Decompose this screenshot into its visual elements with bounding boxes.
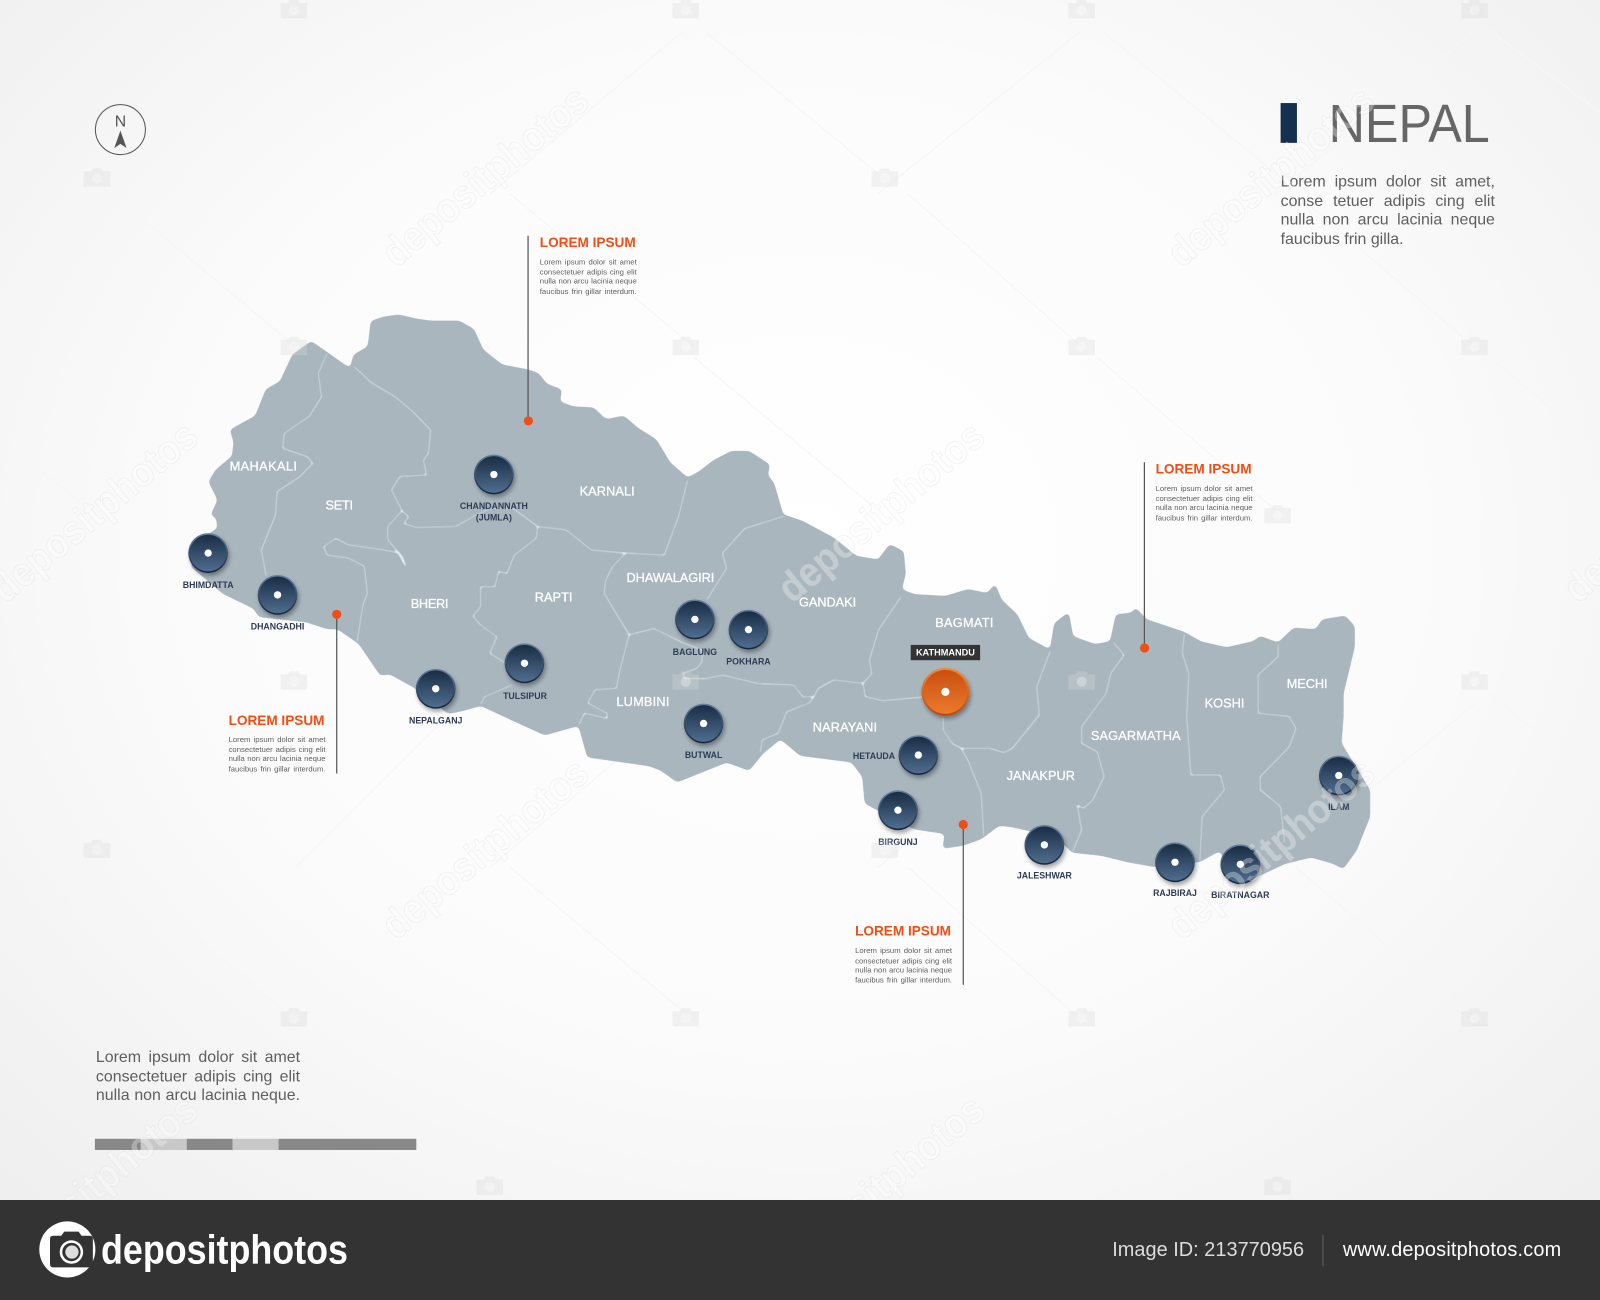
text block: bottom left [96,1049,300,1110]
pin: Biratnagar: BIRATNAGAR [1211,890,1270,900]
icon: compass: N [115,114,126,131]
intro text: faucibus frin gilla. [1281,231,1404,248]
callout: north: Lorem ipsum dolor sit amet [540,257,637,266]
title block [1281,95,1495,251]
pin: Birgunj: BIRGUNJ [878,837,918,847]
region names: SAGARMATHA [1091,728,1181,743]
region names: SETI [326,498,353,513]
capital: Kathmandu [911,645,980,716]
callout: east: Lorem ipsum dolor sit amet [1156,484,1253,493]
callout: east: consectetuer adipis cing elit [1156,493,1253,503]
pin: Tulsipur: TULSIPUR [503,691,548,701]
region names [230,458,1328,783]
text block: bottom left: Lorem ipsum dolor sit amet [96,1049,300,1066]
title: NEPAL [1329,95,1490,154]
callout: east: faucibus frin gillar interdum. [1156,513,1253,522]
region names: JANAKPUR [1007,768,1075,783]
pin: Jaleshwar: JALESHWAR [1017,871,1073,881]
pin: Rajbiraj [1153,842,1197,898]
pin: Butwal [684,704,723,760]
pin: Tulsipur [503,643,548,701]
region names: KOSHI [1205,696,1244,711]
pin: Ilam: ILAM [1328,802,1349,812]
pin: Rajbiraj: RAJBIRAJ [1153,888,1197,898]
intro text [1281,173,1495,251]
callout: south: faucibus frin gillar interdum. [855,975,952,984]
scale bar [95,1139,416,1150]
icon: compass [95,105,145,155]
callout: north: LOREM IPSUM [540,235,636,251]
stock watermarks: depositphotos [372,76,597,276]
pin: Nepalganj: NEPALGANJ [409,715,463,725]
region names: MECHI [1287,676,1328,691]
footer band [0,1200,1600,1300]
pin: Dhangadhi [251,575,304,632]
region names: BHERI [411,596,448,611]
pin: Bhimdatta [183,533,234,590]
callout: west: nulla non arcu lacinia neque [229,754,326,763]
callout: north: nulla non arcu lacinia neque [540,277,637,286]
region names: MAHAKALI [230,458,297,473]
stock watermarks: depositphotos [1158,749,1383,948]
stock watermarks: depositphotos [768,1086,993,1285]
region names: BAGMATI [935,615,993,630]
pin: Pokhara [726,610,771,666]
stock watermarks: depositphotos [768,412,993,611]
callout: west: faucibus frin gillar interdum. [229,764,326,773]
title accent bar [1281,103,1297,143]
pin: Baglung: BAGLUNG [673,647,717,657]
pin: Pokhara: POKHARA [726,656,771,666]
pin: Hetauda [853,735,938,775]
region names: NARAYANI [813,720,877,735]
callout: south: consectetuer adipis cing elit [855,956,952,965]
text block: bottom left: consectetuer adipis cing elit [96,1068,300,1085]
map of Nepal [191,315,1369,880]
capital: Kathmandu: KATHMANDU [916,648,975,658]
text block: bottom left: nulla non arcu lacinia neque. [96,1087,300,1104]
callout: north [524,235,637,426]
callout: east: LOREM IPSUM [1156,461,1252,477]
icon: camera logo [39,1221,95,1278]
stock watermarks: depositphotos [1158,76,1383,276]
callout: west: consectetuer adipis cing elit [229,744,326,754]
intro text: Lorem ipsum dolor sit amet, [1281,173,1495,191]
callout: north: faucibus frin gillar interdum. [540,286,637,296]
pin: Bhimdatta: BHIMDATTA [183,580,234,590]
intro text: conse tetuer adipis cing elit [1281,192,1495,210]
region names: KARNALI [580,483,635,498]
pin: Hetauda: HETAUDA [853,751,896,761]
callout: west [229,610,341,776]
logo wordmark: depositphotos [101,1226,348,1272]
callout: west: Lorem ipsum dolor sit amet [229,735,326,744]
stock watermarks: depositphotos [372,749,597,948]
pin: Chandannath: (JUMLA) [476,512,512,522]
pin: Ilam [1319,756,1359,812]
callout: west: LOREM IPSUM [229,713,324,729]
pin: Biratnagar [1211,844,1270,900]
pin: Jaleshwar [1017,825,1073,881]
intro text: nulla non arcu lacinia neque [1281,211,1495,229]
region names: LUMBINI [616,694,669,709]
pin: Chandannath: CHANDANNATH [460,501,528,511]
pin: Baglung [673,599,717,657]
callout: east: nulla non arcu lacinia neque [1156,503,1253,512]
callout: north: consectetuer adipis cing elit [540,267,637,276]
callout: south: LOREM IPSUM [855,924,951,940]
region borders [261,353,1296,861]
pin: Butwal: BUTWAL [685,750,723,760]
pin: Birgunj [878,790,918,847]
pin: Chandannath [460,455,528,522]
pin: Nepalganj [409,669,463,725]
region names: RAPTI [535,590,572,605]
pin: Dhangadhi: DHANGADHI [251,622,304,632]
callout: south: nulla non arcu lacinia neque [855,965,952,975]
callout: east [1140,461,1253,653]
region names: GANDAKI [799,595,856,610]
callout: south [855,820,968,987]
country shape [191,315,1369,880]
callout: south: Lorem ipsum dolor sit amet [855,946,952,955]
website: www.depositphotos.com [1342,1239,1561,1261]
region names: DHAWALAGIRI [627,570,714,585]
image id: Image ID: 213770956 [1112,1239,1304,1261]
